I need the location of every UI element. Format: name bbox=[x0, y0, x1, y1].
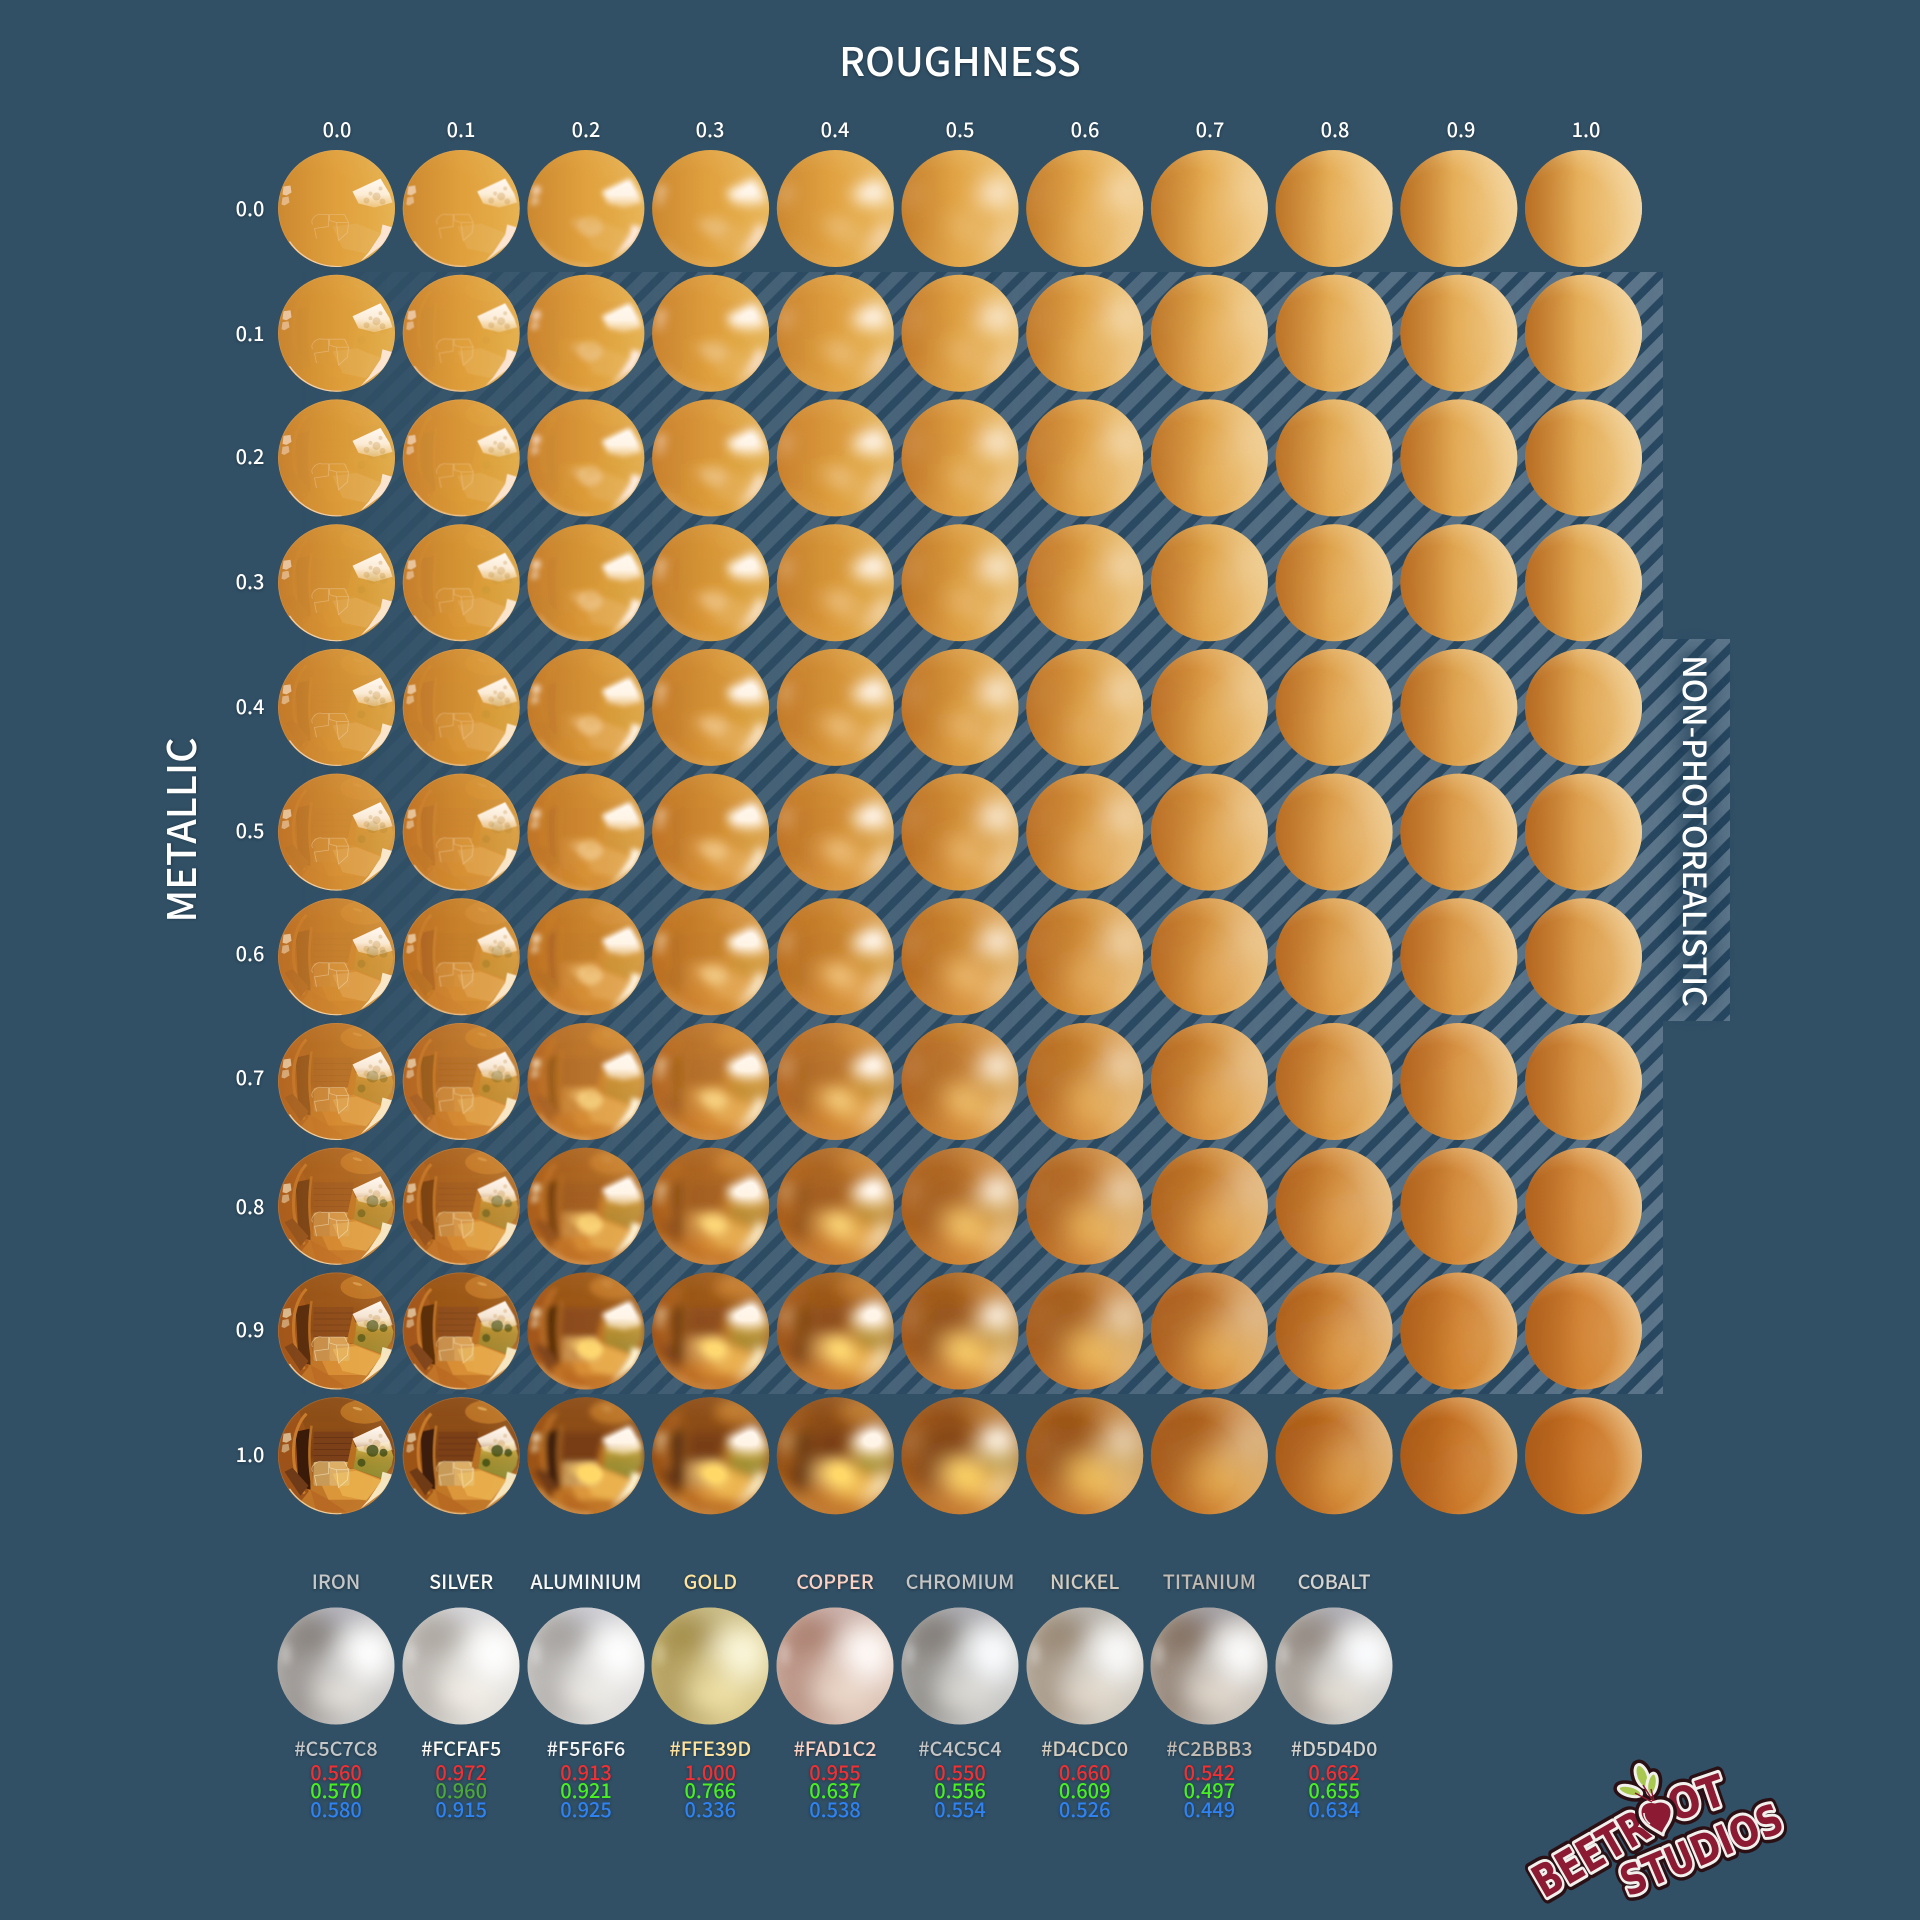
sphere row: metallic 0.2 bbox=[246, 368, 1642, 548]
metal card: nickel: 0.660 bbox=[1059, 1757, 1110, 1786]
metal card: titanium bbox=[1150, 1566, 1268, 1823]
metal card: titanium: 0.542 bbox=[1184, 1757, 1235, 1786]
logo word outline layer: STUDIOS bbox=[1613, 1794, 1790, 1906]
metal card: aluminium: 0.921 bbox=[560, 1775, 612, 1804]
metallic axis labels: 0.0 bbox=[236, 193, 264, 222]
metal card: chromium: 0.556 bbox=[934, 1775, 986, 1804]
metallic axis labels: 0.2 bbox=[236, 441, 264, 470]
metal card: titanium: 0.449 bbox=[1184, 1794, 1235, 1823]
metal card: gold: #FFE39D bbox=[669, 1733, 751, 1762]
metal card: titanium: TITANIUM bbox=[1163, 1566, 1256, 1595]
logo: Beetroot Studios bbox=[1523, 1763, 1790, 1909]
metal card: iron: 0.580 bbox=[310, 1794, 362, 1823]
metal card: copper: #FAD1C2 bbox=[793, 1733, 877, 1762]
metallic axis labels: 0.6 bbox=[236, 938, 264, 967]
metal card: aluminium: 0.925 bbox=[560, 1794, 612, 1823]
metal card: cobalt: 0.662 bbox=[1308, 1757, 1360, 1786]
roughness axis labels: 0.3 bbox=[696, 114, 724, 143]
metal card: chromium: 0.550 bbox=[934, 1757, 986, 1786]
metallic axis labels: 0.4 bbox=[236, 691, 264, 720]
metal card: nickel: NICKEL bbox=[1050, 1566, 1119, 1595]
metal card: cobalt: COBALT bbox=[1298, 1566, 1371, 1595]
side label: non-photorealistic: NON-PHOTOREALISTIC bbox=[1673, 655, 1719, 1007]
logo word fill layer bbox=[1523, 1765, 1790, 1909]
metallic axis labels: 0.7 bbox=[236, 1062, 264, 1091]
metal card: gold: GOLD bbox=[683, 1566, 737, 1595]
metal card: silver: 0.960 bbox=[435, 1775, 487, 1804]
sphere row: metallic 0.3 bbox=[246, 493, 1642, 673]
sphere grid: metallic by roughness bbox=[246, 118, 1642, 1546]
logo word fill layer: BEETR bbox=[1523, 1800, 1659, 1909]
metal card: aluminium: 0.913 bbox=[560, 1757, 612, 1786]
sphere row: metallic 0.5 bbox=[246, 742, 1642, 922]
metal card: aluminium: ALUMINIUM bbox=[530, 1566, 642, 1595]
sphere row: metallic 1.0 bbox=[246, 1366, 1642, 1546]
metal card: copper: 0.955 bbox=[809, 1757, 861, 1786]
metallic axis labels: 0.5 bbox=[236, 815, 264, 844]
roughness axis labels bbox=[322, 114, 1600, 143]
metal card: chromium: #C4C5C4 bbox=[918, 1733, 1002, 1762]
metal card: iron: IRON bbox=[312, 1566, 360, 1595]
sphere row: metallic 0.9 bbox=[246, 1241, 1642, 1421]
logo word fill layer: STUDIOS bbox=[1613, 1794, 1790, 1906]
metal card: chromium bbox=[902, 1566, 1018, 1823]
roughness axis labels: 0.7 bbox=[1196, 114, 1224, 143]
metal card: gold: 1.000 bbox=[685, 1757, 736, 1786]
metal card: iron: #C5C7C8 bbox=[294, 1733, 378, 1762]
non-photorealistic tab background bbox=[1663, 639, 1730, 1021]
metal card: cobalt: 0.634 bbox=[1308, 1794, 1360, 1823]
roughness axis labels: 0.5 bbox=[946, 114, 974, 143]
metal card: nickel: 0.526 bbox=[1059, 1794, 1110, 1823]
logo word fill layer: OT bbox=[1661, 1765, 1732, 1832]
metal card: aluminium: #F5F6F6 bbox=[547, 1733, 625, 1762]
metal card: silver: #FCFAF5 bbox=[421, 1733, 501, 1762]
sphere row: metallic 0.1 bbox=[246, 243, 1642, 423]
metallic axis labels: 0.9 bbox=[236, 1314, 264, 1343]
metal card: aluminium bbox=[528, 1566, 644, 1823]
metal card: silver: SILVER bbox=[429, 1566, 493, 1595]
roughness axis labels: 0.8 bbox=[1321, 114, 1349, 143]
sphere row: metallic 0.4 bbox=[246, 617, 1642, 797]
metal card: cobalt bbox=[1276, 1566, 1392, 1823]
metal card: titanium: 0.497 bbox=[1184, 1775, 1235, 1804]
logo word outline layer: BEETR bbox=[1523, 1800, 1659, 1909]
metallic axis labels: 0.1 bbox=[236, 318, 264, 347]
roughness axis labels: 0.9 bbox=[1447, 114, 1475, 143]
roughness axis labels: 1.0 bbox=[1572, 114, 1600, 143]
sphere row: metallic 0.7 bbox=[246, 992, 1642, 1172]
metal card: iron: 0.570 bbox=[310, 1775, 362, 1804]
roughness axis labels: 0.2 bbox=[572, 114, 600, 143]
metal card: copper: COPPER bbox=[796, 1566, 874, 1595]
metal card: iron: 0.560 bbox=[310, 1757, 362, 1786]
title: roughness: ROUGHNESS bbox=[839, 31, 1081, 88]
metallic axis labels: 0.8 bbox=[236, 1191, 264, 1220]
metal card: nickel: #D4CDC0 bbox=[1041, 1733, 1128, 1762]
metal card: iron bbox=[278, 1566, 394, 1823]
metal card: nickel bbox=[1026, 1566, 1144, 1823]
metal card: titanium: #C2BBB3 bbox=[1166, 1733, 1252, 1762]
metal card: copper: 0.538 bbox=[809, 1794, 861, 1823]
roughness axis labels: 0.4 bbox=[821, 114, 849, 143]
roughness axis labels: 0.6 bbox=[1071, 114, 1099, 143]
metal card: copper bbox=[776, 1566, 894, 1823]
metal card: silver: 0.915 bbox=[435, 1794, 487, 1823]
icon: beetroot bbox=[1617, 1763, 1672, 1835]
metal card: silver: 0.972 bbox=[435, 1757, 487, 1786]
sphere row: metallic 0.8 bbox=[246, 1116, 1642, 1296]
metallic axis labels: 1.0 bbox=[236, 1439, 264, 1468]
metallic axis labels: 0.3 bbox=[236, 566, 264, 595]
logo word outline layer: OT bbox=[1661, 1765, 1732, 1832]
roughness axis labels: 0.1 bbox=[447, 114, 475, 143]
metal card: gold: 0.336 bbox=[685, 1794, 736, 1823]
metal card: chromium: 0.554 bbox=[934, 1794, 986, 1823]
metal card: cobalt: 0.655 bbox=[1308, 1775, 1360, 1804]
logo word outline layer bbox=[1523, 1765, 1790, 1909]
metal card: gold bbox=[652, 1566, 768, 1823]
sphere row: metallic 0.0 bbox=[246, 118, 1642, 298]
sphere row: metallic 0.6 bbox=[246, 867, 1642, 1047]
metal card: nickel: 0.609 bbox=[1059, 1775, 1110, 1804]
metal card: cobalt: #D5D4D0 bbox=[1291, 1733, 1377, 1762]
metal card: copper: 0.637 bbox=[809, 1775, 861, 1804]
metallic axis labels bbox=[236, 193, 264, 1468]
metal card: chromium: CHROMIUM bbox=[906, 1566, 1014, 1595]
axis title: metallic: METALLIC bbox=[151, 737, 208, 922]
roughness axis labels: 0.0 bbox=[323, 114, 351, 143]
metal card: gold: 0.766 bbox=[685, 1775, 736, 1804]
metal card: silver bbox=[402, 1566, 520, 1823]
hatched non-photorealistic region bbox=[490, 272, 1663, 1394]
